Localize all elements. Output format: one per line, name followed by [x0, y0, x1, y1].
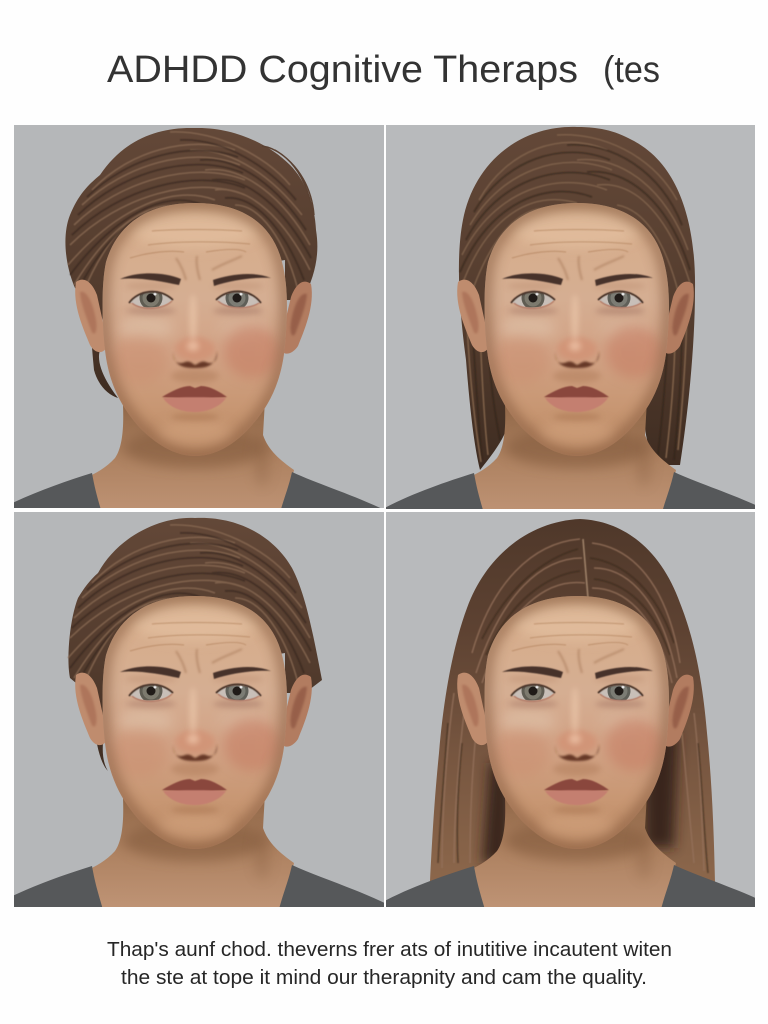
- title: ADHDD Cognitive Theraps: [107, 49, 578, 91]
- hair parting: [583, 539, 588, 598]
- hair: short swept back: [65, 128, 317, 398]
- neck and shirt: [14, 798, 384, 907]
- eyebrows: [120, 666, 271, 679]
- eyebrows: [120, 273, 271, 286]
- lips: [162, 779, 227, 805]
- ears: [75, 280, 312, 354]
- caption text: the ste at tope it mind our therapnity and cam the quality.: [121, 967, 647, 989]
- face: [484, 203, 669, 456]
- title: (tes: [603, 49, 660, 90]
- hair: short slicked back: [68, 518, 322, 771]
- nose: [173, 294, 217, 368]
- face: [102, 203, 287, 456]
- eyes: [510, 290, 644, 310]
- eyebrows: [502, 666, 653, 679]
- lips: [162, 386, 227, 412]
- lips: [544, 386, 609, 412]
- nose: [173, 687, 217, 761]
- nose: [555, 294, 599, 368]
- caption text: [107, 939, 672, 989]
- neck and shirt: [14, 406, 380, 508]
- face: [484, 596, 669, 849]
- ears: [75, 673, 312, 747]
- ears: [457, 280, 694, 354]
- panel: bottom-left portrait, short swept hair: [0, 512, 395, 918]
- eyes: [128, 682, 262, 702]
- eyes: [510, 682, 644, 702]
- panel: top-left portrait, short swept hair: [14, 125, 384, 508]
- nose: [555, 687, 599, 761]
- panel: bottom-right portrait, long parted hair: [372, 512, 768, 918]
- eyebrows: [502, 273, 653, 286]
- eyes: [128, 290, 262, 310]
- panel: top-right portrait, long thin hair: [386, 125, 755, 509]
- face: [102, 596, 287, 849]
- hair: shoulder length, pulled back: [459, 127, 695, 470]
- hair: long with centre parting: [430, 519, 715, 883]
- lips: [544, 779, 609, 805]
- ears: [457, 673, 694, 747]
- caption text: Thap's aunf chod. theverns frer ats of inutitive incautent witen: [107, 939, 672, 961]
- neck and shirt: [386, 798, 755, 907]
- neck and shirt: [386, 406, 755, 509]
